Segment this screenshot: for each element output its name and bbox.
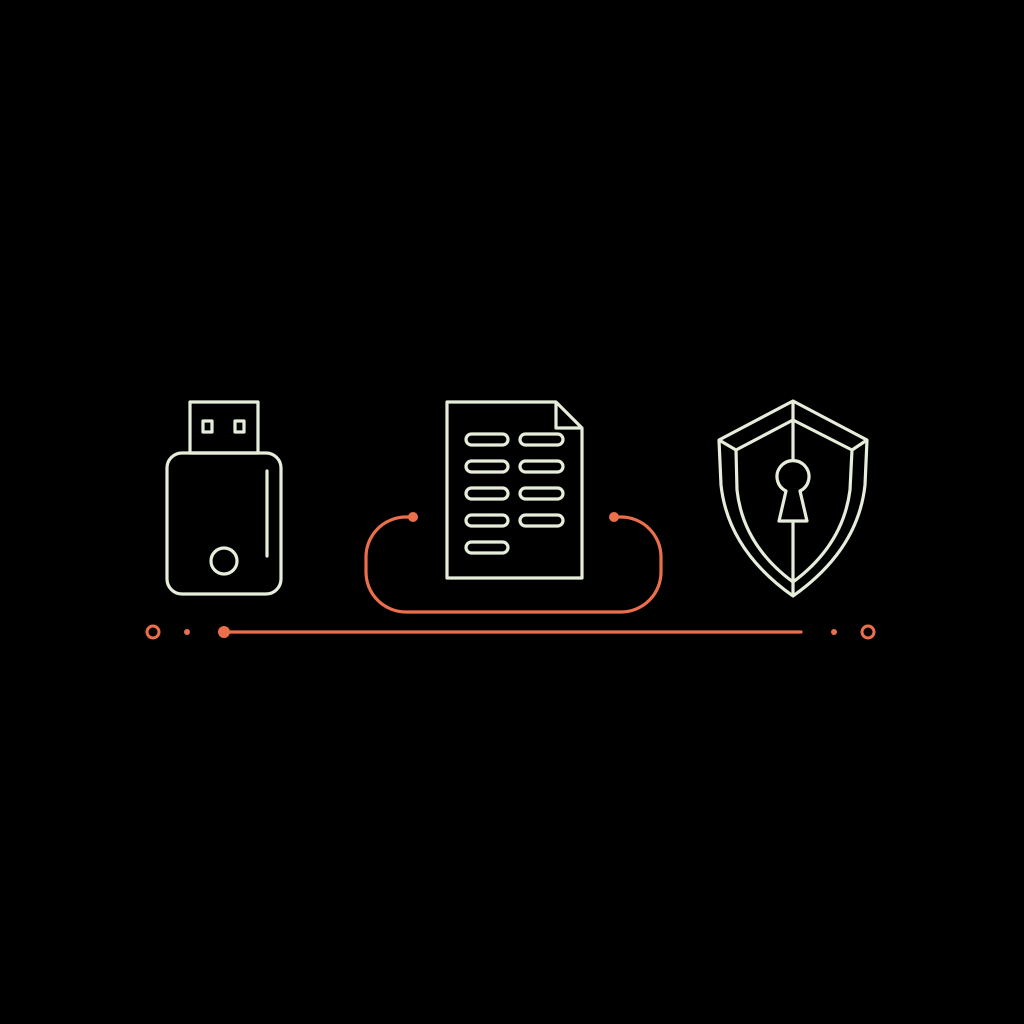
icon: usb drive <box>167 402 281 594</box>
icon: shield with keyhole <box>719 401 867 596</box>
connector loop <box>366 512 661 612</box>
timeline <box>147 626 874 638</box>
icon: document <box>447 402 582 578</box>
